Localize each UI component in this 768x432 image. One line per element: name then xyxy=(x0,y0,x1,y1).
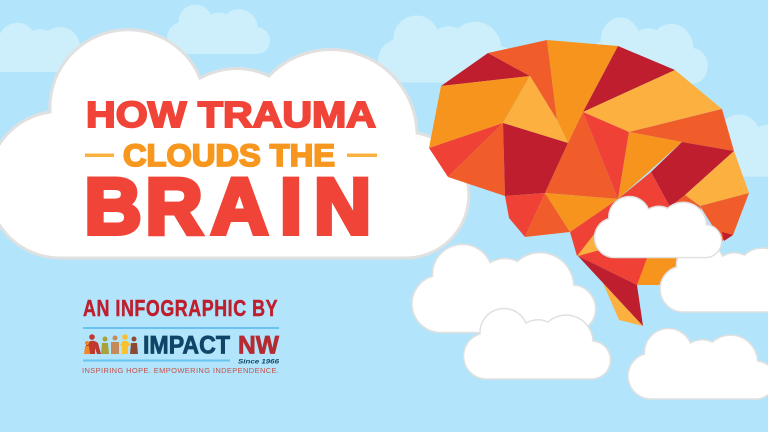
logo wordmark: IMPACT xyxy=(143,332,230,360)
title line 1: HOW TRAUMA xyxy=(86,94,376,135)
title line 3: BRAIN xyxy=(84,162,371,250)
main title cloud xyxy=(0,30,469,258)
icon: family figures xyxy=(84,334,138,354)
tagline: INSPIRING HOPE. EMPOWERING INDEPENDENCE. xyxy=(82,366,279,375)
cloud: lower large xyxy=(412,244,596,333)
cloud: over brain xyxy=(595,197,722,258)
polygon brain xyxy=(429,40,749,326)
title side rules xyxy=(85,154,377,157)
white clouds xyxy=(412,197,768,399)
cloud: right middle xyxy=(660,241,768,312)
faint background clouds xyxy=(0,5,768,177)
Impact NW logo xyxy=(82,327,279,375)
cloud: bottom right xyxy=(628,328,768,399)
title xyxy=(84,94,376,250)
since date: Since 1966 xyxy=(238,358,279,366)
logo NW: NW xyxy=(238,332,279,360)
title line 2: CLOUDS THE xyxy=(123,137,335,173)
logo rules xyxy=(83,327,279,329)
byline: AN INFOGRAPHIC BY xyxy=(83,296,278,322)
cloud: lower centre xyxy=(464,308,611,379)
